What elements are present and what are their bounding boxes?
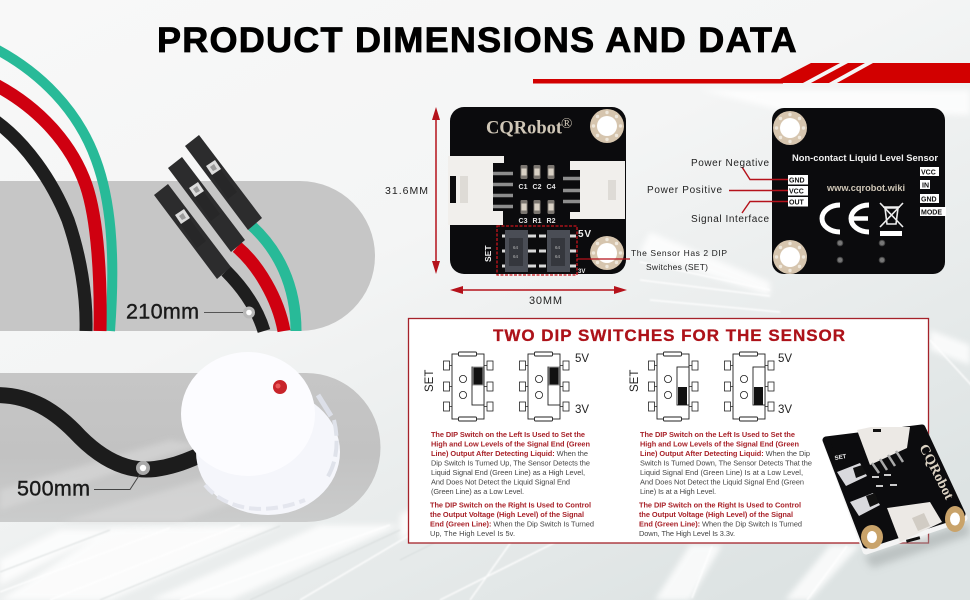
callout: DIP switches: Switches (SET)	[646, 262, 708, 272]
switches	[834, 454, 897, 516]
right pin labels: VCC	[921, 170, 936, 176]
components: C2	[533, 184, 542, 191]
callout: 500mm	[17, 461, 150, 500]
callout: DIP switches: The Sensor Has 2 DIP	[631, 248, 727, 258]
DIP diagrams: SET	[424, 370, 436, 392]
sensor board: front: ®	[561, 116, 572, 132]
text block: left setting: The DIP Switch on the Right Is Used to Control	[430, 500, 591, 510]
text block: right setting: Line) Output After Detecting Liquid: When the Dip	[640, 449, 810, 458]
vias	[837, 240, 885, 263]
logo rotated: CQRobot	[915, 442, 956, 503]
text block: left setting: the Output Voltage (High Level) of the Signal	[430, 510, 584, 519]
right pin labels: IN	[922, 182, 929, 190]
callout: 210mm	[126, 300, 255, 324]
text block: left setting: Dip Switch Is Turned Up, The Sensor Detects the	[431, 458, 590, 468]
angled sensor board photo	[826, 427, 970, 568]
sensor cable	[0, 395, 198, 470]
components	[519, 165, 556, 225]
text block: right setting: End (Green Line): When the Dip Switch Is Turned	[639, 520, 802, 528]
red accent bar	[533, 63, 970, 84]
text block: right setting: Liquid Signal End (Green Line) Is at a Low Level,	[640, 468, 803, 477]
pin callouts: Power Negative	[691, 158, 769, 169]
pin callouts: Power Positive	[647, 185, 722, 196]
DIP switches on board	[483, 226, 591, 275]
long cable bundle	[0, 48, 112, 331]
grey pill: upper cable band	[0, 181, 375, 331]
brand logo: CQRobot	[486, 118, 563, 138]
components: C4	[547, 184, 556, 191]
callout: 500mm: 500mm	[17, 476, 90, 500]
top connector	[857, 427, 910, 473]
text block: left setting: Up, The High Level Is 5v.	[430, 529, 515, 538]
text block: left setting: (Green Line) as a Low Level.	[431, 487, 524, 496]
left connector	[448, 156, 513, 225]
front board dimensions: 31.6MM	[385, 185, 428, 197]
callout: DIP switches	[577, 248, 727, 272]
text block: right setting: Switch Is Turned Down, The Sensor Detects That the	[640, 458, 812, 468]
right pin labels	[920, 167, 946, 216]
sensor board: back: www.cqrobot.wiki	[826, 183, 905, 193]
text block: right setting: Down, The High Level Is 3.3v.	[639, 529, 735, 538]
text block: left setting: Line) Output After Detecting Liquid: When the	[431, 449, 588, 458]
components: C3	[519, 218, 528, 225]
title: PRODUCT DIMENSIONS AND DATA	[157, 20, 797, 60]
DIP switches on board: 64	[555, 254, 561, 259]
right pin labels: MODE	[921, 210, 942, 216]
text block: left setting: Liquid Signal End (Green Line) as a High Level,	[431, 468, 585, 477]
DIP switches on board: 64	[555, 245, 561, 250]
dupont connectors	[154, 135, 262, 279]
panel: two DIP switches	[408, 318, 928, 543]
DIP diagrams: 3V	[575, 404, 589, 416]
text block: left setting: End (Green Line): When the Dip Switch Is Turned	[430, 520, 594, 528]
front board dimensions	[385, 107, 627, 307]
text block: right setting: And Does Not Detect the Liquid Signal End (Green	[640, 478, 804, 486]
components: C1	[519, 184, 528, 191]
text block: left setting	[430, 430, 594, 538]
connector wires	[226, 226, 296, 331]
text block: left setting: And Does Not Detect the Liquid Signal End	[431, 478, 570, 486]
DIP diagrams	[424, 352, 792, 421]
sensor board: back: Non-contact Liquid Level Sensor	[792, 153, 938, 164]
text block: right setting: High and Low Levels of the Signal End (Green	[640, 440, 799, 448]
grey pill: lower sensor band	[0, 373, 381, 522]
left pin labels: VCC	[789, 188, 804, 196]
components: R1	[533, 218, 542, 225]
callout: 210mm: 210mm	[126, 300, 199, 324]
DIP diagrams: 3V	[778, 404, 792, 416]
mounting holes	[861, 506, 965, 549]
left pin labels: GND	[789, 178, 805, 184]
heading: TWO DIP SWITCHES FOR THE SENSOR	[493, 326, 845, 345]
DIP switches on board: 64	[513, 254, 519, 259]
sensor board: back	[772, 108, 946, 274]
text block: left setting: The DIP Switch on the Left Is Used to Set the	[431, 430, 585, 439]
DIP switches on board: 3V	[578, 269, 585, 275]
text block: right setting	[639, 430, 812, 538]
switches: SET	[834, 454, 847, 462]
DIP switches on board: 5V	[578, 229, 591, 240]
text block: right setting: Line) Is at a High Level.	[640, 487, 716, 496]
text block: right setting: the Output Voltage (High Level) of the Signal	[639, 510, 793, 519]
pin callouts	[647, 158, 788, 225]
text block: right setting: The DIP Switch on the Left Is Used to Set the	[640, 430, 795, 439]
sensor board: front	[448, 107, 626, 275]
left pin labels	[788, 175, 808, 206]
text block: right setting: The DIP Switch on the Right Is Used to Control	[639, 500, 801, 510]
DIP switches on board: 64	[513, 245, 519, 250]
right pin labels: GND	[921, 196, 937, 204]
DIP diagrams: 5V	[778, 353, 792, 365]
right connector	[563, 161, 625, 219]
components: R2	[547, 218, 556, 225]
liquid level sensor cap	[181, 352, 340, 515]
DIP switches on board: SET	[483, 245, 493, 262]
CE mark	[822, 205, 869, 232]
front board dimensions: 30MM	[529, 295, 562, 307]
pin callouts: Signal Interface	[691, 214, 769, 225]
WEEE icon	[880, 203, 903, 236]
left pin labels: OUT	[789, 200, 804, 206]
text block: left setting: High and Low Levels of the Signal End (Green	[431, 440, 590, 448]
DIP diagrams: SET	[629, 370, 641, 392]
bottom connector	[887, 502, 942, 543]
DIP diagrams: 5V	[575, 353, 589, 365]
